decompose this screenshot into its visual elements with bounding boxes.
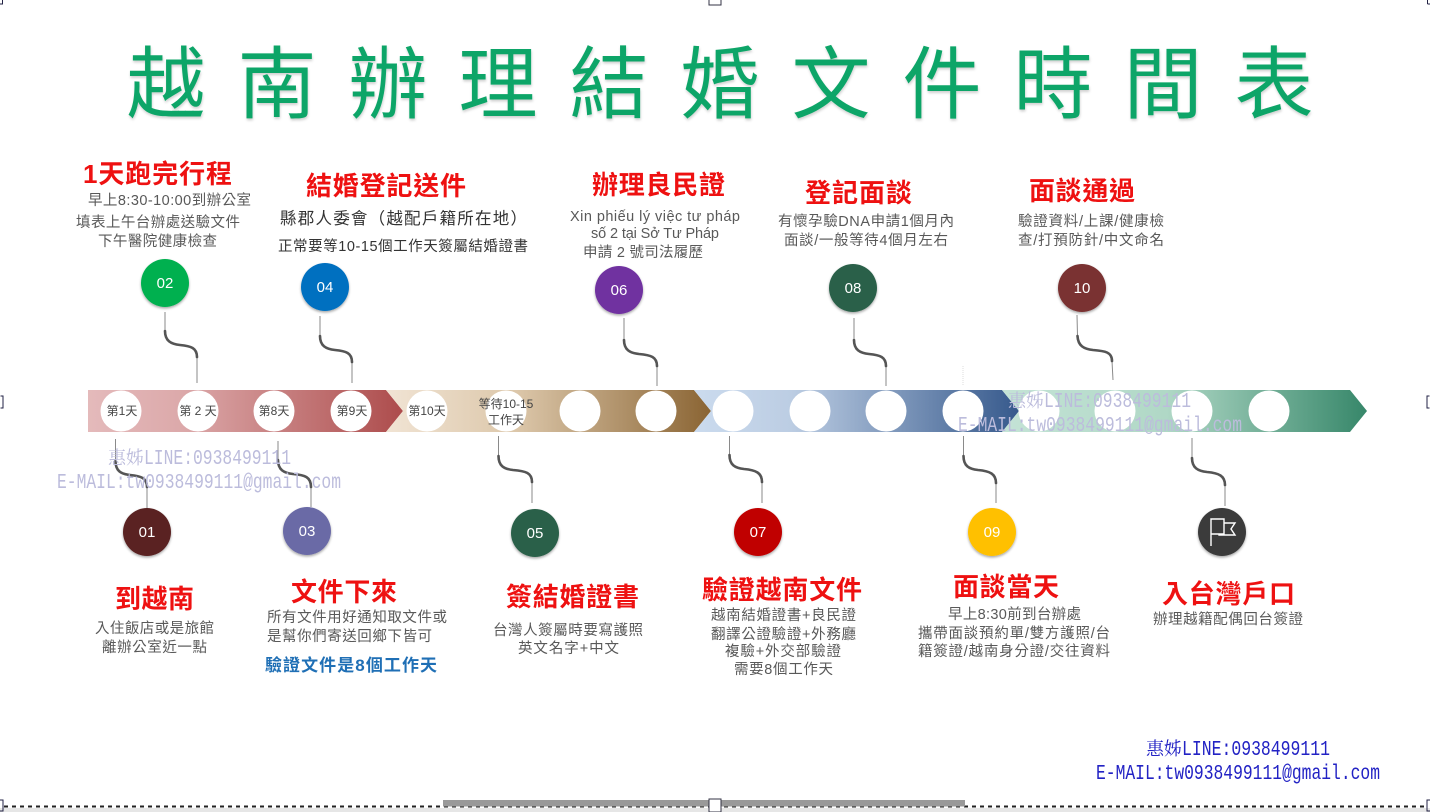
node 01: 01 <box>139 524 155 541</box>
heading 09: 面談當天 <box>953 572 1059 602</box>
connector 07 <box>730 436 762 503</box>
final step: Taiwan household <box>1153 438 1304 628</box>
text 02 <box>76 192 251 250</box>
bar segment: blue <box>694 390 1019 432</box>
connector final <box>1192 438 1225 506</box>
heading 06: 辦理良民證 <box>592 170 725 200</box>
connector 05 <box>498 436 532 503</box>
text 07: 複驗+外交部驗證 <box>725 642 842 660</box>
node 03 <box>283 507 331 555</box>
connector 01 <box>116 439 147 508</box>
text 03 <box>267 609 447 645</box>
text 02: 早上8:30-10:00到辦公室 <box>88 192 251 209</box>
step 03 <box>265 441 447 675</box>
text 07: 需要8個工作天 <box>734 661 833 678</box>
connector 03 <box>278 441 311 507</box>
text 09: 籍簽證/越南身分證/交往資料 <box>918 642 1110 660</box>
text 04: 縣郡人委會（越配戶籍所在地） <box>280 209 527 228</box>
node 09 <box>968 508 1016 556</box>
connector 08 <box>854 318 886 386</box>
heading 10: 面談通過 <box>1029 176 1135 206</box>
node 05: 05 <box>527 525 543 542</box>
text 05: 英文名字+中文 <box>518 640 620 657</box>
step 07 <box>702 436 862 678</box>
heading 01: 到越南 <box>115 584 194 614</box>
step 04 <box>278 171 528 383</box>
node 08: 08 <box>845 280 861 297</box>
watermark left: LINE:0938499111 <box>144 448 291 471</box>
contact info: 惠姊 <box>1146 739 1182 759</box>
bar segment: days 10 onward <box>386 390 711 432</box>
connector 06 <box>624 318 657 386</box>
node 07: 07 <box>750 524 766 541</box>
day labels: 等待10-15 <box>479 396 534 411</box>
timeline bar <box>88 390 1367 432</box>
text 10 <box>1018 213 1164 249</box>
heading 07: 驗證越南文件 <box>702 575 862 605</box>
day labels: 第8天 <box>259 403 289 418</box>
text 05 <box>493 621 643 657</box>
node 10 <box>1058 264 1106 312</box>
step 02 <box>76 159 251 383</box>
connector 10 <box>1077 315 1113 380</box>
text 07: 越南結婚證書+良民證 <box>711 607 856 624</box>
text 01 <box>95 620 214 656</box>
heading 04: 結婚登記送件 <box>306 171 466 201</box>
day labels: 第9天 <box>337 403 367 418</box>
text 08: 面談/一般等待4個月左右 <box>784 231 948 249</box>
step 06 <box>570 170 740 386</box>
watermark left <box>57 448 341 495</box>
text 02: 下午醫院健康檢查 <box>98 233 217 250</box>
icon: flag <box>1198 508 1246 556</box>
text 10: 驗證資料/上課/健康檢 <box>1018 213 1164 230</box>
node 06: 06 <box>611 282 627 299</box>
day labels: 第 2 天 <box>179 403 217 418</box>
node 05 <box>511 509 559 557</box>
text 07 <box>711 607 856 678</box>
text 08: 有懷孕驗DNA申請1個月內 <box>778 213 954 230</box>
watermark over bar: E-MAIL:tw0938499111@gmail.com <box>958 415 1242 438</box>
day labels: 第10天 <box>408 403 446 418</box>
heading 03: 文件下來 <box>291 577 397 607</box>
node 09: 09 <box>984 524 1000 541</box>
heading 08: 登記面談 <box>805 178 912 208</box>
text 03: 所有文件用好通知取文件或 <box>267 609 447 626</box>
connector 04 <box>320 316 352 383</box>
heading 02: 1天跑完行程 <box>83 159 232 189</box>
connector 02 <box>165 312 197 383</box>
text 02: 填表上午台辦處送驗文件 <box>76 214 240 231</box>
contact info <box>1096 739 1380 786</box>
note 03: 驗證文件是8個工作天 <box>265 655 437 675</box>
heading 05: 簽結婚證書 <box>506 582 639 612</box>
text 01: 入住飯店或是旅館 <box>95 620 214 637</box>
text 08 <box>778 213 954 249</box>
step 01 <box>95 439 214 656</box>
text 06: 申請 2 號司法履歷 <box>583 244 703 261</box>
text 06: số 2 tại Sở Tư Pháp <box>591 226 719 242</box>
text 03: 是幫你們寄送回鄉下皆可 <box>267 627 432 645</box>
connector 09 <box>964 436 996 503</box>
step 08 <box>778 178 954 386</box>
text 07: 翻譯公證驗證+外務廳 <box>711 625 856 643</box>
text 01: 離辦公室近一點 <box>102 638 207 656</box>
text 06 <box>570 209 740 261</box>
node 04: 04 <box>317 279 333 296</box>
day labels: 第1天 <box>107 403 137 418</box>
text 06: Xin phiếu lý việc tư pháp <box>570 209 740 225</box>
watermark over bar: LINE:0938499111 <box>1044 391 1191 414</box>
watermark over bar <box>958 391 1242 438</box>
text 09: 早上8:30前到台辦處 <box>948 606 1082 623</box>
watermark over bar: 惠姊 <box>1008 391 1044 411</box>
node 07 <box>734 508 782 556</box>
node 10: 10 <box>1074 280 1090 297</box>
bar segment: days 1-9 <box>88 390 403 432</box>
day markers <box>100 390 1290 432</box>
bar segment: green <box>1002 390 1367 432</box>
text final: 辦理越籍配偶回台簽證 <box>1153 611 1304 628</box>
heading final: 入台灣戶口 <box>1162 579 1295 609</box>
node 04 <box>301 263 349 311</box>
node 06 <box>595 266 643 314</box>
text 09 <box>918 606 1110 660</box>
step 10 <box>1018 176 1164 380</box>
watermark left: E-MAIL:tw0938499111@gmail.com <box>57 472 341 495</box>
node 08 <box>829 264 877 312</box>
node 03: 03 <box>299 523 315 540</box>
node 01 <box>123 508 171 556</box>
node 02 <box>141 259 189 307</box>
text 04: 正常要等10-15個工作天簽屬結婚證書 <box>278 237 528 255</box>
step 09 <box>918 436 1110 660</box>
node 02: 02 <box>157 275 173 292</box>
text 09: 攜帶面談預約單/雙方護照/台 <box>918 625 1110 642</box>
day labels: 工作天 <box>488 413 524 427</box>
text 04 <box>278 209 528 255</box>
contact info: LINE:0938499111 <box>1182 739 1330 762</box>
watermark left: 惠姊 <box>108 448 144 468</box>
day labels <box>107 396 534 427</box>
step 05 <box>493 436 643 657</box>
text 05: 台灣人簽屬時要寫護照 <box>493 621 643 639</box>
title: 越南辦理結婚文件時間表 <box>126 40 1314 129</box>
text 10: 查/打預防針/中文命名 <box>1018 231 1164 249</box>
